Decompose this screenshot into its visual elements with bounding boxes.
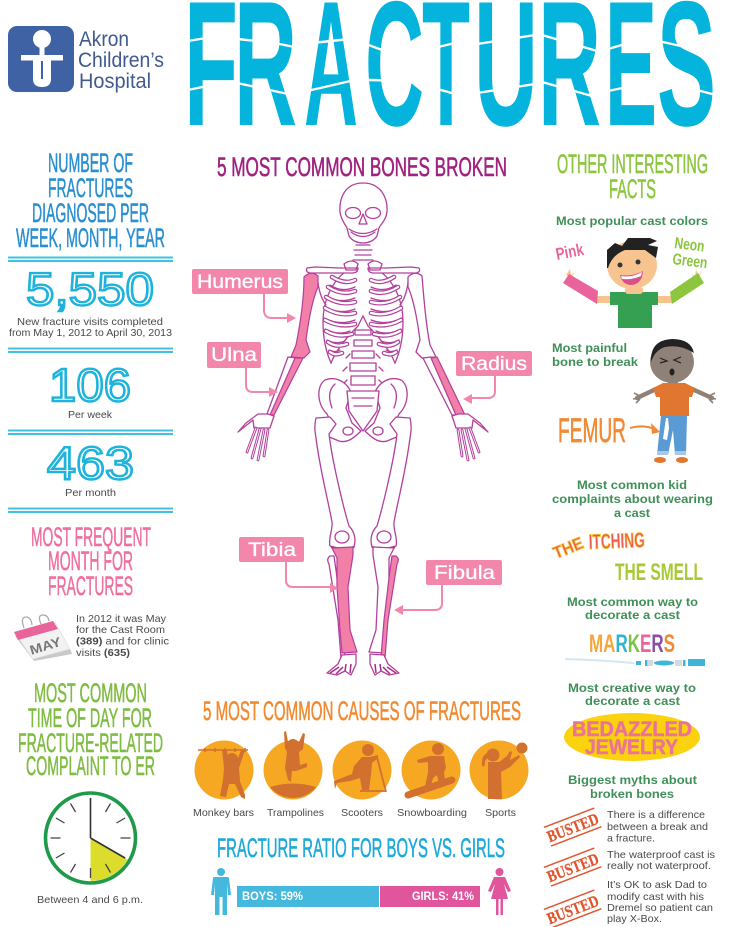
myth 1: between a break and	[607, 822, 708, 833]
lower legs	[328, 547, 398, 658]
fact: kid complaints: ITCHING	[588, 529, 645, 554]
panel: other interesting facts	[544, 149, 716, 927]
fact: decorate with markers	[565, 597, 705, 666]
heading: most common time: FRACTURE-RELATED	[18, 728, 163, 758]
fact: myths about broken bones: Biggest myths about	[568, 775, 697, 787]
fact: decorate with markers: MARKERS	[589, 630, 675, 658]
bar: girls 41%	[380, 886, 480, 907]
fact: bedazzled jewelry: decorate a cast	[585, 696, 680, 708]
myth 3: It’s OK to ask Dad to	[607, 880, 707, 891]
left and right femurs	[315, 417, 411, 548]
torso	[306, 261, 420, 385]
icon: happy boy	[563, 238, 704, 328]
skeleton illustration	[238, 183, 488, 675]
heading: number of fractures: WEEK, MONTH, YEAR	[16, 223, 165, 253]
heading: most common time: MOST COMMON	[34, 678, 147, 708]
myth 1	[607, 810, 708, 844]
stat: 106 per week: Per week	[68, 410, 113, 421]
cause labels: Trampolines	[267, 808, 324, 819]
fact: most painful bone	[552, 339, 716, 463]
heading: most common time: TIME OF DAY FOR	[28, 703, 152, 733]
icon: calendar: MAY	[28, 634, 63, 658]
fact: myths about broken bones	[544, 775, 715, 927]
fact: bedazzled jewelry: Most creative way to	[568, 683, 696, 695]
bone: ulna	[270, 358, 303, 415]
hands	[238, 414, 488, 460]
icon: monkey bars	[194, 740, 254, 800]
myth 1: There is a difference	[607, 810, 705, 821]
label: Ulna with arrow	[207, 342, 278, 397]
fact: kid complaints: THE	[550, 533, 586, 563]
bar: boys 59%	[237, 886, 379, 907]
stat: 463 per month: Per month	[65, 488, 116, 499]
label: Radius with arrow	[456, 351, 532, 404]
text: may details: visits (635)	[76, 647, 130, 659]
heading: other interesting facts: FACTS	[609, 174, 656, 204]
label: Humerus with arrow	[192, 269, 296, 323]
bone: fibula	[381, 556, 398, 658]
fact: kid complaints	[550, 480, 713, 586]
right tibia	[369, 547, 394, 653]
panel: weekly monthly yearly numbers	[8, 148, 173, 512]
icon: snowboard	[402, 740, 460, 800]
left fibula	[328, 556, 345, 658]
fact: kid complaints: Most common kid	[577, 480, 687, 492]
stat: 5,550	[9, 263, 172, 339]
myth 3: Dremel so patient can	[607, 903, 713, 914]
label: Tibia with arrow: Tibia	[248, 540, 297, 561]
spine	[343, 330, 383, 385]
pelvis	[315, 379, 411, 442]
panel: fracture ratio	[211, 833, 511, 915]
heading: fracture ratio: FRACTURE RATIO FOR BOYS VS. GIRLS	[217, 833, 505, 863]
fact: kid complaints: a cast	[614, 508, 650, 520]
logo wordmark	[78, 28, 164, 93]
myth 3: play X-Box.	[607, 914, 662, 925]
fact: bedazzled jewelry	[564, 683, 700, 761]
icon: trampoline	[264, 731, 322, 800]
icon: sports	[470, 740, 528, 800]
bar: boys 59%: BOYS: 59%	[242, 891, 303, 903]
label: Ulna with arrow: Ulna	[211, 345, 258, 366]
stat: 5,550: 5,550	[26, 263, 154, 315]
myth 2	[607, 850, 715, 872]
fact: cast colors: Pink	[554, 240, 586, 264]
title: FRACTURES	[184, 0, 716, 163]
myth 2: really not waterproof.	[607, 861, 711, 872]
label: Fibula with arrow	[394, 560, 502, 615]
ribs left	[306, 261, 358, 363]
myth 2: The waterproof cast is	[607, 850, 715, 861]
cause labels: Sports	[485, 808, 516, 819]
heading: most common time	[18, 678, 163, 781]
fact: decorate with markers: decorate a cast	[585, 610, 680, 622]
icon: girl figure	[488, 868, 511, 915]
label: Radius with arrow: Radius	[461, 354, 527, 375]
logo wordmark: Children’s	[78, 49, 164, 72]
panel: most frequent month	[14, 522, 169, 661]
cause labels: Monkey bars	[193, 808, 254, 819]
icon: clock	[46, 793, 136, 883]
bone: humerus	[291, 273, 318, 358]
bar: girls 41%: GIRLS: 41%	[412, 891, 474, 903]
heading: most frequent month: MONTH FOR	[48, 546, 133, 576]
heading: 5 most common bones broken: 5 MOST COMMON BONES BROKEN	[217, 152, 507, 182]
text: may details	[76, 613, 169, 659]
logo wordmark: Hospital	[79, 70, 151, 93]
fact: cast colors: Most popular cast colors	[556, 216, 708, 228]
cause labels: Snowboarding	[397, 808, 467, 819]
stamp: busted 2: BUSTED	[544, 849, 601, 886]
heading: other interesting facts	[557, 149, 708, 204]
heading: most frequent month	[31, 522, 151, 601]
stamp: busted 3: BUSTED	[544, 891, 601, 927]
label: Fibula with arrow: Fibula	[434, 563, 496, 584]
fact: cast colors: Neon	[674, 235, 705, 256]
bone: tibia	[332, 547, 357, 653]
myth 3	[607, 880, 713, 925]
label: Tibia with arrow	[239, 537, 338, 593]
icon: hurt kid	[633, 339, 716, 463]
label: Humerus with arrow: Humerus	[197, 272, 283, 293]
fact: kid complaints: complaints about wearing	[552, 494, 713, 506]
cause labels: Scooters	[341, 808, 383, 819]
text: may details: for the Cast Room	[76, 624, 165, 636]
logo wordmark: Akron	[79, 28, 129, 51]
heading: most common time: COMPLAINT TO ER	[26, 751, 155, 781]
icon: scooter	[332, 740, 392, 800]
fact: cast colors: Green	[672, 251, 708, 272]
stat: 5,550: New fracture visits completed	[17, 317, 163, 328]
fact: myths about broken bones: broken bones	[590, 789, 674, 801]
panel: common causes of fractures	[193, 696, 528, 819]
fact: cast colors	[554, 216, 708, 328]
icon: logo badge	[8, 26, 74, 92]
heading: number of fractures: NUMBER OF	[48, 148, 133, 178]
caption: between 4 and 6 pm: Between 4 and 6 p.m.	[37, 895, 143, 906]
fact: most painful bone: Most painful	[552, 343, 627, 355]
panel: most common time of day	[18, 678, 163, 906]
text: may details: (389) and for clinic	[76, 636, 169, 648]
heading: number of fractures	[16, 148, 165, 253]
stat: 106 per week: 106	[49, 359, 131, 411]
heading: number of fractures: FRACTURES	[48, 173, 133, 203]
icon: marker	[565, 659, 705, 666]
cause labels	[193, 808, 516, 819]
text: may details: In 2012 it was May	[76, 613, 167, 625]
arm left with humerus and ulna	[267, 273, 318, 415]
skull	[340, 183, 387, 260]
heading: most frequent month: FRACTURES	[48, 571, 133, 601]
feet	[327, 654, 399, 675]
fact: bedazzled jewelry: JEWELRY	[585, 736, 678, 759]
stamp: busted 1: BUSTED	[544, 809, 601, 846]
fact: most painful bone: bone to break	[552, 357, 639, 369]
bone: radius	[431, 357, 465, 415]
fact: bedazzled jewelry: BEDAZZLED	[572, 718, 692, 741]
myth 3: modify cast with his	[607, 892, 704, 903]
fact: most painful bone: FEMUR	[558, 412, 626, 450]
myth 1: a fracture.	[607, 834, 655, 844]
stat: 5,550: from May 1, 2012 to April 30, 2013	[9, 328, 172, 339]
fact: decorate with markers: Most common way to	[567, 597, 698, 609]
icon: calendar	[14, 615, 72, 661]
heading: number of fractures: DIAGNOSED PER	[32, 198, 149, 228]
arm right with radius	[408, 273, 465, 415]
logo: Akron Children's Hospital	[8, 26, 164, 93]
icon: boy figure	[211, 868, 231, 915]
stat: 463 per month: 463	[47, 437, 134, 489]
heading: most frequent month: MOST FREQUENT	[31, 522, 151, 552]
